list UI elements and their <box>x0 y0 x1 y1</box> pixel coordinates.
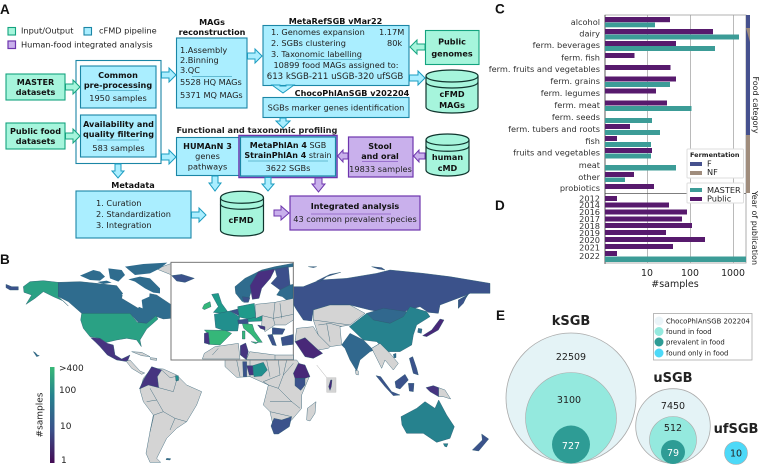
database: cFMD MAGs: MAGs <box>439 100 465 110</box>
box: HUMAnN 3 <box>176 138 240 176</box>
box: Availability and quality filtering: quality filtering <box>83 129 154 139</box>
circles: uSGB: 79 <box>667 448 679 459</box>
database: cFMD <box>220 191 264 236</box>
box: Common pre-processing <box>80 66 156 108</box>
axis labels: categories <box>489 17 601 261</box>
axis labels: categories: ferm. beverages <box>533 40 600 50</box>
box: MetaPhlAn 4 and StrainPhlAn 4: 3622 SGBs <box>266 163 310 173</box>
side labels: Food category <box>751 76 760 134</box>
box: MAGs reconstruction: reconstruction <box>179 27 246 37</box>
axis labels: categories: 2020 <box>579 235 600 245</box>
database: cFMD: cFMD <box>228 215 254 225</box>
axis labels: categories: ferm. meat <box>554 100 601 110</box>
legend: fermentation <box>687 149 744 178</box>
label: panel D: D <box>495 198 505 213</box>
box: MetaRefSGB: MetaRefSGB vMar22 <box>289 16 382 26</box>
box: Availability and quality filtering <box>80 115 156 157</box>
legend: samples colour scale: >400 <box>59 364 84 374</box>
label: panel A: A <box>0 2 10 17</box>
box: MetaRefSGB: 1. Genomes expansion <box>271 27 365 37</box>
axis labels: categories: ferm. seeds <box>552 112 600 122</box>
box: MAGs reconstruction: 2.Binning <box>180 55 219 65</box>
legend: SGB categories: ChocoPhlAnSGB 202204 <box>666 318 750 326</box>
box: MASTER datasets: MASTER <box>17 77 55 87</box>
axis labels: categories: ferm. grains <box>550 76 600 86</box>
label: panel B: B <box>0 252 10 267</box>
database: human cMD: cMD <box>438 163 458 173</box>
axis labels: categories: ferm. tubers and roots <box>508 124 600 134</box>
box: Integrated analysis: Integrated analysis <box>311 201 399 211</box>
box: MetaRefSGB: 10899 food MAGs assigned to: <box>273 60 399 70</box>
box: MAGs reconstruction: 1.Assembly <box>180 45 227 55</box>
map: Africa, Asia and Oceania <box>225 267 490 451</box>
box: Common pre-processing: 1950 samples <box>89 93 147 103</box>
box: MASTER datasets: datasets <box>16 87 55 97</box>
side bar: fermentation <box>746 15 750 193</box>
legend: samples colour scale: #samples <box>36 392 46 437</box>
axis labels: categories: 2017 <box>579 214 600 224</box>
map: Canadian arctic islands <box>80 263 167 293</box>
circles: kSGB: 22509 <box>556 352 586 363</box>
legend: cohort <box>687 183 744 204</box>
axis: samples: 100 <box>681 268 699 279</box>
box: Metadata: 2. Standardization <box>96 209 171 219</box>
axis labels: categories: 2018 <box>579 221 600 231</box>
box: ChocoPhlAnSGB: SGBs marker genes identification <box>268 102 404 112</box>
circles: uSGB <box>636 371 710 464</box>
side labels: Year of publication <box>750 190 759 265</box>
bars: food category <box>605 17 739 189</box>
legend: samples colour scale: 100 <box>59 386 76 396</box>
panel: A workflow <box>0 2 479 238</box>
database: human cMD: human <box>432 152 463 162</box>
legend: SGB categories <box>654 314 752 360</box>
legend: cohort: MASTER <box>707 185 741 195</box>
axis labels: categories: meat <box>579 160 601 170</box>
box: Stool and oral: and oral <box>361 151 399 161</box>
circles: uSGB: 7450 <box>661 401 685 412</box>
circles: kSGB: 3100 <box>557 395 581 406</box>
label: panel E: E <box>496 308 505 323</box>
circles: ufSGB: ufSGB <box>714 422 758 437</box>
box: Availability and quality filtering: 583 samples <box>92 143 145 153</box>
box: MetaPhlAn 4 and StrainPhlAn 4: StrainPhlAn 4 strain <box>244 151 332 160</box>
axis labels: categories: ferm. fruits and vegetables <box>489 64 600 74</box>
axis labels: categories: probiotics <box>560 183 600 193</box>
legend: SGB categories: found in food <box>666 328 712 336</box>
bars: year of publication <box>605 196 746 262</box>
panel: E nested circles <box>496 308 758 464</box>
box: MetaRefSGB: 3. Taxonomic labelling <box>271 49 362 59</box>
axis labels: categories: 2019 <box>579 228 600 238</box>
panel: B world map <box>0 252 490 465</box>
box: Metadata <box>76 180 191 238</box>
box: HUMAnN 3: genes <box>195 151 220 161</box>
legend: fermentation: Fermentation <box>690 151 740 159</box>
axis labels: categories: 2022 <box>579 251 600 261</box>
box: MetaPhlAn 4 and StrainPhlAn 4: MetaPhlAn 4 SGB <box>250 141 326 150</box>
box: Public food datasets: Public food <box>10 126 61 136</box>
heading: functional and taxonomic profiling: Functional and taxonomic profiling <box>176 125 337 135</box>
database: cFMD MAGs <box>426 70 478 113</box>
box: MetaRefSGB: 80k <box>387 38 402 48</box>
circles: kSGB: kSGB <box>552 314 590 329</box>
axis labels: categories: dairy <box>579 28 600 38</box>
axis labels: categories: ferm. fish <box>561 52 600 62</box>
map: Americas <box>6 263 202 462</box>
chart grid and axes <box>605 15 746 264</box>
axis: samples <box>641 268 745 290</box>
circles: kSGB <box>506 314 636 464</box>
database: human cMD <box>426 134 469 176</box>
panel: C and D bar charts <box>489 2 760 290</box>
box: HUMAnN 3: HUMAnN 3 <box>183 141 232 151</box>
legend: SGB categories: prevalent in food <box>666 338 725 346</box>
side labels <box>750 76 760 265</box>
box: Metadata: 1. Curation <box>96 198 141 208</box>
box: Public genomes <box>426 30 479 64</box>
axis: samples: #samples <box>651 279 699 290</box>
box: MetaPhlAn 4 and StrainPhlAn 4 <box>239 136 337 178</box>
box: pre-processing group <box>76 60 161 164</box>
box: Metadata: Metadata <box>111 180 155 190</box>
box: Stool and oral: 19833 samples <box>349 164 412 174</box>
legend: SGB categories: found only in food <box>666 350 728 358</box>
box: Common pre-processing: Common <box>98 70 138 80</box>
box: Common pre-processing: pre-processing <box>84 80 152 90</box>
box: MASTER datasets <box>6 74 65 100</box>
box: MetaRefSGB: 2. SGBs clustering <box>271 38 346 48</box>
box: MAGs reconstruction: 5528 HQ MAGs <box>180 77 242 87</box>
box: Public food datasets: datasets <box>16 136 55 146</box>
legend: pipeline colours <box>8 26 157 50</box>
box: Public genomes: Public <box>438 36 466 46</box>
axis: samples: 10 <box>641 268 653 279</box>
box: MAGs reconstruction: MAGs <box>199 17 225 27</box>
box: Metadata: 3. Integration <box>96 220 152 230</box>
axis: samples: 1000 <box>721 268 745 279</box>
box: Public genomes: genomes <box>431 48 473 58</box>
box: HUMAnN 3: pathways <box>188 162 227 172</box>
box: Public food datasets <box>6 123 65 149</box>
box: MAGs reconstruction <box>176 17 247 108</box>
box: ChocoPhlAnSGB: ChocoPhlAnSGB v202204 <box>295 88 410 98</box>
axis labels: categories: 2016 <box>579 207 600 217</box>
axis labels: categories: other <box>578 172 601 182</box>
legend: fermentation: NF <box>707 167 718 177</box>
box: MetaRefSGB: 1.17M <box>379 27 404 37</box>
box: Availability and quality filtering: Availability and <box>83 119 154 129</box>
box: Stool and oral: Stool <box>368 141 392 151</box>
arrows: workflow connections <box>66 40 425 222</box>
axis labels: categories: alcohol <box>571 17 600 27</box>
axis labels: categories: fruits and vegetables <box>513 148 600 158</box>
box: MAGs reconstruction: 3.QC <box>180 65 200 75</box>
axis labels: categories: 2014 <box>579 200 600 210</box>
box: ChocoPhlAnSGB <box>263 88 410 118</box>
legend: pipeline colours: cFMD pipeline <box>99 26 157 36</box>
box: Stool and oral <box>348 137 413 177</box>
box: Integrated analysis <box>290 196 420 230</box>
database: cFMD MAGs: cFMD <box>439 89 465 99</box>
circles: kSGB: 727 <box>562 441 580 452</box>
circles: ufSGB: 10 <box>730 448 742 460</box>
circles: ufSGB <box>714 422 758 464</box>
legend: pipeline colours: Human-food integrated analysis <box>21 40 153 50</box>
box: Integrated analysis: 43 common prevalent species <box>293 214 417 224</box>
circles: uSGB: 512 <box>664 423 682 434</box>
circles: uSGB: uSGB <box>653 371 693 386</box>
legend: samples colour scale <box>36 364 84 465</box>
box: MetaRefSGB <box>263 16 409 86</box>
box: MetaRefSGB: 613 kSGB-211 uSGB-320 ufSGB <box>267 72 403 82</box>
axis labels: categories: ferm. legumes <box>541 88 600 98</box>
legend: cohort: Public <box>707 194 731 204</box>
axis labels: categories: fish <box>585 136 600 146</box>
axis labels: categories: 2021 <box>579 242 600 252</box>
label: panel C: C <box>495 2 505 16</box>
legend: pipeline colours: Input/Output <box>21 26 74 36</box>
legend: samples colour scale: 10 <box>60 422 72 432</box>
map: Europe inset <box>171 262 293 360</box>
legend: fermentation: F <box>707 158 712 168</box>
axis labels: categories: 2012 <box>579 194 600 204</box>
box: MAGs reconstruction: 5371 MQ MAGs <box>180 90 243 100</box>
